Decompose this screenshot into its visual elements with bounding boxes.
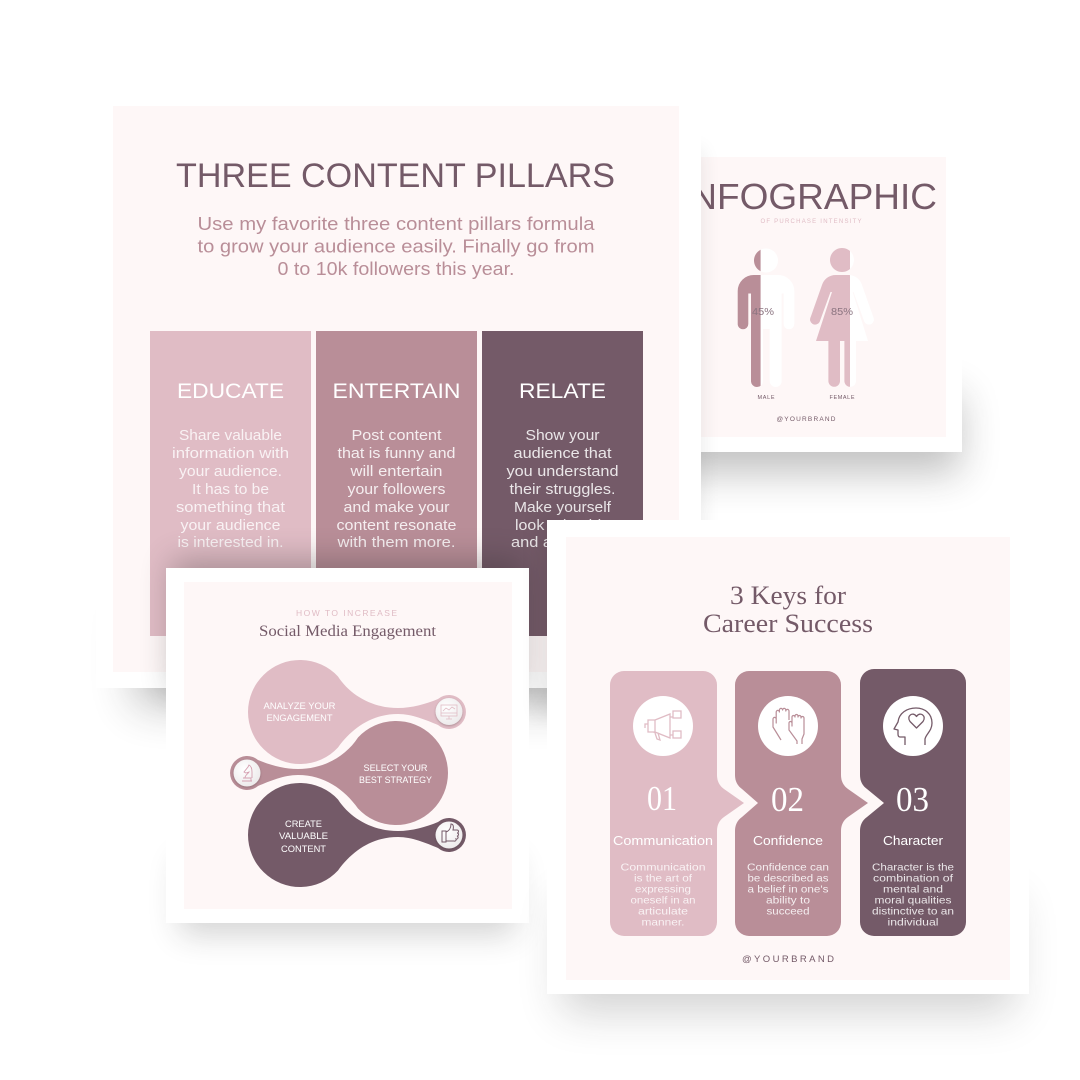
- description: [872, 862, 954, 928]
- blob: create: CREATE: [285, 819, 322, 829]
- subtitle: to grow your audience easily. Finally go from: [198, 236, 594, 256]
- icon: thumbs up: [436, 822, 462, 848]
- pillar: entertain: Post content: [352, 428, 442, 444]
- icon: male figure 45%: 45%: [752, 307, 774, 318]
- blob: create: CONTENT: [281, 844, 327, 854]
- pillar: educate: is interested in.: [178, 535, 284, 551]
- blob: create: VALUABLE: [279, 831, 328, 841]
- description: [747, 862, 829, 918]
- pillar: relate: audience that: [514, 446, 612, 462]
- description: a belief in one's: [748, 884, 828, 896]
- pillar: relate: RELATE: [519, 379, 606, 403]
- blob: select: [230, 721, 448, 825]
- pillar: relate: look relatable: [515, 518, 610, 534]
- pillar: relate: their struggles.: [510, 482, 616, 498]
- blob: select: BEST STRATEGY: [359, 775, 432, 785]
- icon: male figure 45%: [738, 250, 774, 387]
- pillar: educate: Share valuable: [179, 428, 282, 444]
- description: moral qualities: [874, 894, 952, 906]
- blob: select: SELECT YOUR: [364, 763, 428, 773]
- pillar: entertain: content resonate: [336, 518, 456, 534]
- icon: female figure 85%: [810, 248, 853, 387]
- heading: Social Media Engagement: [259, 623, 437, 640]
- pillar: educate: your audience: [180, 518, 280, 534]
- pillar: educate: your audience.: [179, 464, 282, 480]
- description: Communication: [620, 862, 706, 874]
- description: be described as: [748, 872, 828, 884]
- subtitle: 0 to 10k followers this year.: [278, 258, 514, 279]
- pillar: educate: something that: [176, 500, 285, 516]
- heading: infographic: INFOGRAPHIC: [680, 176, 937, 217]
- pillar: entertain: will entertain: [349, 464, 442, 480]
- description: mental and: [883, 884, 943, 896]
- icon: female figure 85%: 85%: [831, 307, 853, 318]
- pillar: educate: EDUCATE: [177, 379, 284, 403]
- pillar: educate: [150, 331, 311, 636]
- number: 01: [647, 779, 677, 818]
- description: is the art of: [634, 872, 692, 884]
- pillar: entertain: with them more.: [336, 535, 456, 551]
- card: social media engagement: [166, 560, 529, 934]
- pillar: relate: Show your: [526, 428, 600, 444]
- step 1: communication: [610, 671, 744, 936]
- pillar: educate: It has to be: [192, 482, 269, 498]
- pillar: entertain: and make your: [344, 500, 450, 516]
- number: 03: [896, 780, 929, 819]
- subtitle: Use my favorite three content pillars formula: [198, 213, 595, 234]
- card: 3 keys for career success: [540, 515, 1029, 1012]
- icon: raised hands: [758, 696, 818, 756]
- pillar: entertain: that is funny and: [338, 446, 456, 462]
- brand handle: @YOURBRAND: [742, 954, 834, 965]
- label: female: FEMALE: [830, 395, 855, 401]
- card: three content pillars: [96, 91, 701, 705]
- heading: Confidence: [753, 834, 823, 848]
- pillar: relate: [482, 331, 643, 636]
- title: [703, 581, 873, 638]
- subheading: of purchase intensity: OF PURCHASE INTENSITY: [760, 219, 862, 225]
- pillar: relate: and authentic.: [511, 535, 614, 551]
- pillar: entertain: your followers: [348, 482, 446, 498]
- icon: head with heart: [883, 696, 943, 756]
- icon: megaphone: [633, 696, 693, 756]
- label: male: MALE: [758, 395, 775, 401]
- pillar: relate: Make yourself: [514, 500, 612, 516]
- blob: create: [248, 783, 466, 887]
- description: succeed: [766, 906, 810, 918]
- step 3: character: [860, 669, 966, 936]
- pillar: educate: information with: [172, 446, 289, 462]
- title: 3 Keys for: [730, 581, 846, 610]
- subtitle: [198, 213, 595, 279]
- description: ability to: [766, 894, 810, 906]
- title: Career Success: [703, 609, 873, 638]
- description: Confidence can: [747, 862, 829, 874]
- description: Character is the: [872, 862, 954, 874]
- description: oneself in an: [630, 894, 696, 906]
- icon: monitor chart: [436, 698, 462, 725]
- pillar: entertain: ENTERTAIN: [332, 379, 460, 403]
- heading: Communication: [613, 834, 713, 848]
- pillar: entertain: [316, 331, 477, 636]
- description: combination of: [873, 872, 953, 884]
- kicker: HOW TO INCREASE: [296, 608, 397, 618]
- number: 02: [771, 780, 804, 819]
- card: infographic of purchase intensity: [701, 184, 980, 494]
- heading: Character: [883, 834, 943, 848]
- description: manner.: [642, 916, 684, 928]
- brand handle: @YOURBRAND: [776, 416, 836, 423]
- description: expressing: [635, 884, 691, 896]
- title: THREE CONTENT PILLARS: [176, 157, 615, 195]
- description: individual: [888, 916, 938, 928]
- description: [620, 862, 706, 928]
- blob: analyze: ANALYZE YOUR: [264, 701, 336, 711]
- step 2: confidence: [735, 671, 868, 936]
- pillar: relate: you understand: [506, 464, 618, 480]
- description: distinctive to an: [872, 906, 954, 918]
- description: articulate: [638, 906, 688, 918]
- icon: chess knight: [234, 760, 260, 786]
- blob: analyze: ENGAGEMENT: [266, 713, 333, 723]
- blob: analyze: [248, 660, 466, 764]
